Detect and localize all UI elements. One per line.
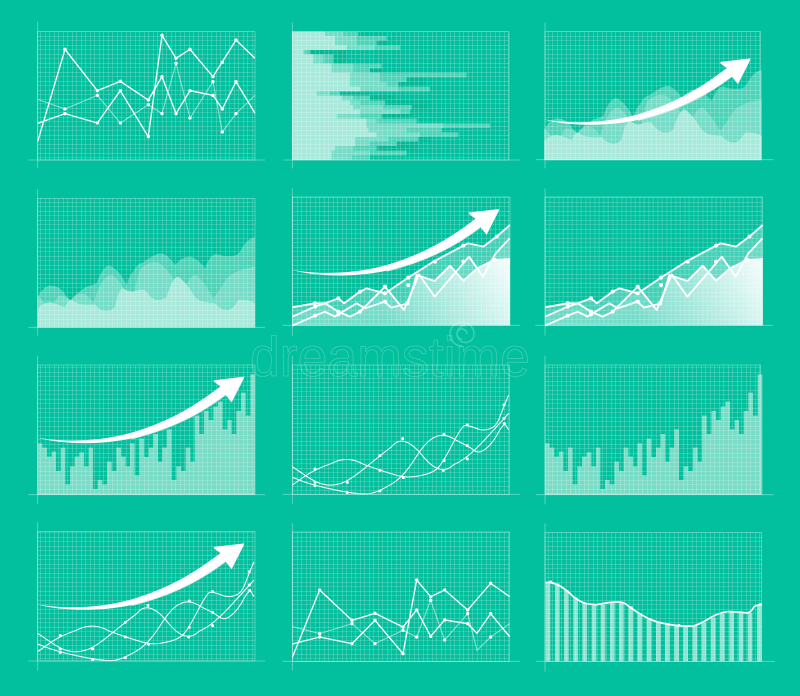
watermark swirl icon <box>450 322 474 346</box>
panel: column chart with arrow <box>28 356 265 504</box>
panel: horizontal stacked bars <box>283 23 520 168</box>
panel: area chart with arrow <box>536 23 773 168</box>
panel: column chart <box>536 356 773 504</box>
panel: layered area chart <box>28 189 265 336</box>
panel: striped columns with curve <box>536 523 775 672</box>
panel: smooth curves with arrow <box>28 522 265 671</box>
panel: rising lines with arrow <box>283 188 520 336</box>
panel: rising lines over gradient area <box>535 188 773 336</box>
panel: line chart compressed <box>283 523 520 671</box>
panel: line chart with three series <box>28 22 265 168</box>
panel: smooth curves <box>283 356 520 504</box>
watermark text: dreamstime <box>250 325 530 388</box>
